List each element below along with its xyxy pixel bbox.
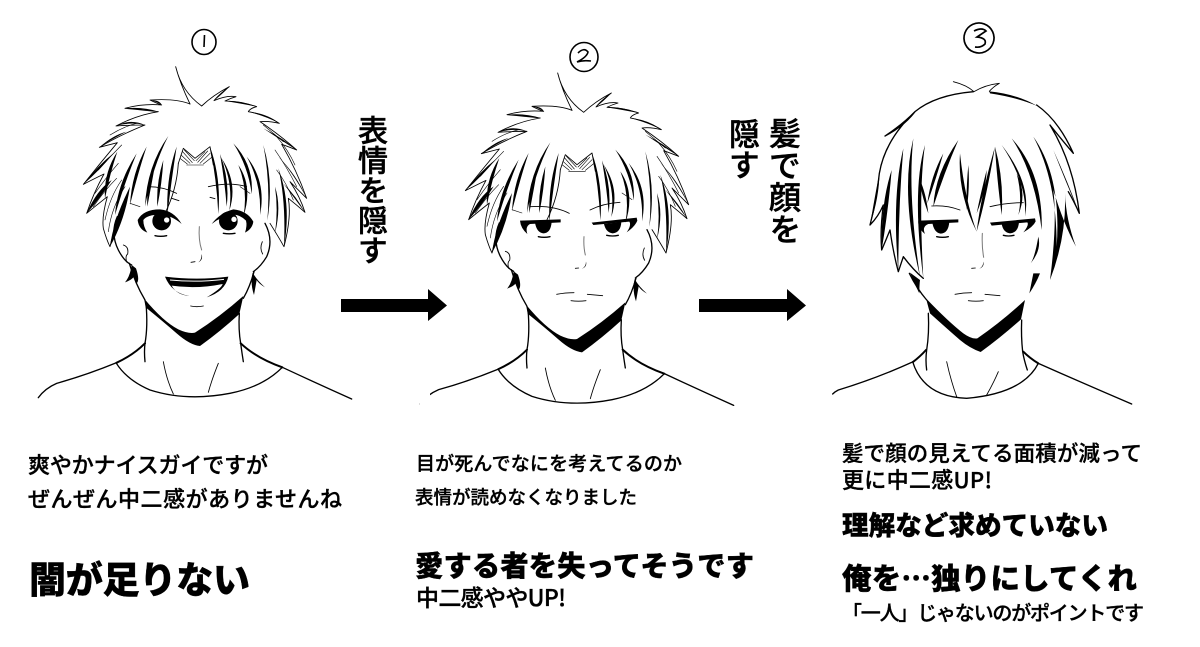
note 2: 中二感ややUP! xyxy=(416,579,566,613)
left eye xyxy=(918,219,958,237)
closed mouth xyxy=(955,293,1000,301)
nose xyxy=(575,237,586,269)
eyebrows xyxy=(530,202,620,213)
caption 1 xyxy=(28,448,342,514)
eyebrows xyxy=(148,184,247,201)
right eye xyxy=(990,218,1036,236)
arrow 2 xyxy=(699,289,806,321)
punchline 3b: 俺を…独りにしてくれ xyxy=(842,556,1137,598)
caption 2 xyxy=(415,449,682,510)
punchline 2: 愛する者を失ってそうです xyxy=(415,544,754,585)
vertical label: hide expression: 表情を隠す xyxy=(351,115,395,265)
eyebrows xyxy=(932,203,1023,210)
caption 2: 表情が読めなくなりました xyxy=(415,484,637,510)
caption 1: 爽やかナイスガイですが xyxy=(28,448,268,480)
number 1 xyxy=(192,30,216,54)
cover on body left xyxy=(420,383,430,407)
vertical label: hide, second line: 隠す xyxy=(722,118,767,180)
figure 1: smiling character xyxy=(38,67,352,399)
vertical label: hide face with hair: 髪で顔を xyxy=(762,117,808,245)
closed mouth xyxy=(557,293,603,301)
right eye xyxy=(212,209,253,234)
punchline 3a: 理解など求めていない xyxy=(842,504,1108,543)
caption 1: ぜんぜん中二感がありませんね xyxy=(28,482,342,514)
figure 2: dead-eyed character xyxy=(420,73,734,407)
nose xyxy=(972,233,984,269)
caption 3 xyxy=(842,437,1142,495)
left eye xyxy=(520,219,561,237)
caption 3: 髪で顔の見えてる面積が減って xyxy=(842,437,1142,468)
jaw and shadow xyxy=(909,273,1040,352)
open mouth xyxy=(165,277,228,307)
arrow 1 xyxy=(341,289,447,321)
hair outline xyxy=(870,82,1079,280)
number 2 xyxy=(570,42,598,72)
number 3 xyxy=(960,19,998,57)
punchline 1: 闇が足りない xyxy=(29,550,250,604)
neck and shoulders xyxy=(833,313,1132,404)
left eye xyxy=(138,209,182,236)
note 3: 「一人」じゃないのがポイントです xyxy=(842,597,1144,626)
figure 3: hair-covered character xyxy=(833,82,1132,404)
nose xyxy=(191,227,202,262)
right eye xyxy=(592,218,637,236)
caption 2: 目が死んでなにを考えてるのか xyxy=(416,449,682,476)
caption 3: 更に中二感UP! xyxy=(842,463,992,495)
